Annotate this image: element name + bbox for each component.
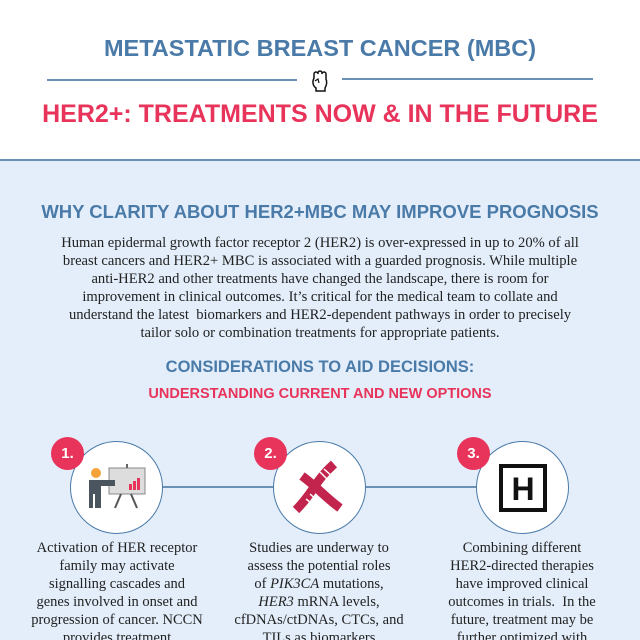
background panel xyxy=(0,159,640,640)
subtitle: HER2+: TREATMENTS NOW & IN THE FUTURE xyxy=(42,100,598,128)
paragraph: Human epidermal growth factor receptor 2 (HER2) is over-expressed in up to 20% of all xyxy=(61,235,579,251)
badge 1: 1. xyxy=(61,445,74,462)
paragraph xyxy=(61,235,579,341)
text column 3: outcomes in trials. In the xyxy=(448,594,596,610)
text column 3: Combining different xyxy=(463,540,581,556)
paragraph: tailor solo or combination treatments for appropriate patients. xyxy=(140,325,500,341)
text column 1: genes involved in onset and xyxy=(36,594,198,610)
paragraph: anti-HER2 and other treatments have changed the landscape, there is room for xyxy=(91,271,549,287)
connector line xyxy=(117,486,522,488)
badge 2: 2. xyxy=(264,445,277,462)
title: METASTATIC BREAST CANCER (MBC) xyxy=(104,35,536,61)
text column 1 xyxy=(31,540,203,640)
heading: considerations: CONSIDERATIONS TO AID DECISIONS: xyxy=(166,358,474,376)
step 1 icon xyxy=(70,441,163,534)
text column 1: signalling cascades and xyxy=(49,576,185,592)
icon: fist xyxy=(312,70,328,92)
text column 2: Studies are underway to xyxy=(249,540,389,556)
paragraph: understand the latest biomarkers and HER2-dependent pathways in order to precisely xyxy=(69,307,571,323)
subheading: UNDERSTANDING CURRENT AND NEW OPTIONS xyxy=(148,386,492,402)
text column 3 xyxy=(448,540,596,640)
text column 3: HER2-directed therapies xyxy=(450,558,594,574)
text column 2 xyxy=(234,540,404,640)
badge 3: 3. xyxy=(467,445,480,462)
text column 2: cfDNAs/ctDNAs, CTCs, and xyxy=(234,612,404,628)
text column 1: family may activate xyxy=(59,558,175,574)
text column 2: HER3 mRNA levels, xyxy=(258,594,380,610)
text column 2: of PIK3CA mutations, xyxy=(254,576,384,592)
text column 3: future, treatment may be xyxy=(451,612,593,628)
step 3 icon: hospital H xyxy=(476,441,569,534)
paragraph: breast cancers and HER2+ MBC is associated with a guarded prognosis. While multiple xyxy=(63,253,577,269)
paragraph: improvement in clinical outcomes. It’s critical for the medical team to collate and xyxy=(82,289,558,305)
step 2 icon: DNA xyxy=(273,441,366,534)
heading: why clarity: WHY CLARITY ABOUT HER2+MBC MAY IMPROVE PROGNOSIS xyxy=(41,201,599,222)
text column 2: assess the potential roles xyxy=(248,558,390,574)
badge 1 xyxy=(51,437,84,470)
text column 1: Activation of HER receptor xyxy=(37,540,197,556)
text column 1: progression of cancer. NCCN xyxy=(31,612,203,628)
badge 2 xyxy=(254,437,287,470)
step 3 icon: hospital H: H xyxy=(511,471,535,507)
divider with fist icon xyxy=(47,70,593,92)
text column 3: have improved clinical xyxy=(456,576,588,592)
badge 3 xyxy=(457,437,490,470)
